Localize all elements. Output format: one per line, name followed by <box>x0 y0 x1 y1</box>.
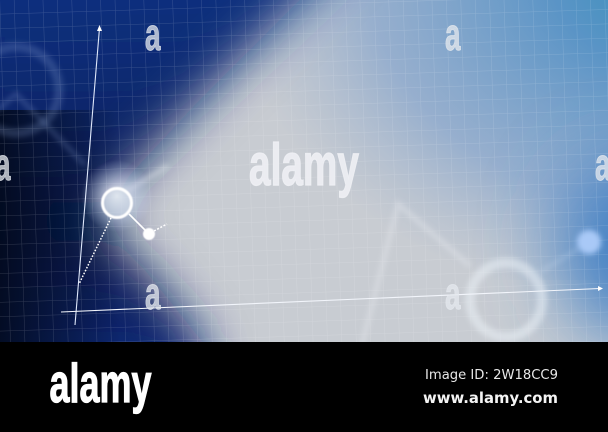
website: www.alamy.com <box>423 389 558 407</box>
alamy logo: alamy <box>50 352 152 414</box>
blurred dot <box>577 230 601 254</box>
watermark alamy: alamy <box>249 132 359 198</box>
dotted trailing line <box>154 224 167 231</box>
watermark small a marks <box>0 9 608 319</box>
y axis <box>75 25 102 325</box>
watermark small a marks: a <box>145 9 161 60</box>
grid <box>0 0 608 342</box>
dotted line to axis <box>79 218 111 284</box>
line to blurred dot <box>551 248 578 266</box>
large blurred ring <box>470 263 542 337</box>
faint peak line lower right <box>362 204 470 345</box>
x axis <box>61 286 603 312</box>
bright glow around node <box>82 162 148 229</box>
faint ring and line top left <box>0 47 85 165</box>
blue glow top right <box>278 0 608 265</box>
image id: Image ID: 2W18CC9 <box>425 367 558 383</box>
watermark small a marks: a <box>445 268 461 319</box>
watermark small a marks: a <box>145 268 161 319</box>
video frame background <box>0 0 608 342</box>
watermark small a marks: a <box>445 9 461 60</box>
connector to small dot <box>129 214 146 231</box>
black footer bar <box>0 342 608 432</box>
small dot <box>143 228 155 240</box>
glow streak <box>128 166 168 190</box>
navy region left <box>0 0 352 342</box>
ring node <box>102 188 132 218</box>
